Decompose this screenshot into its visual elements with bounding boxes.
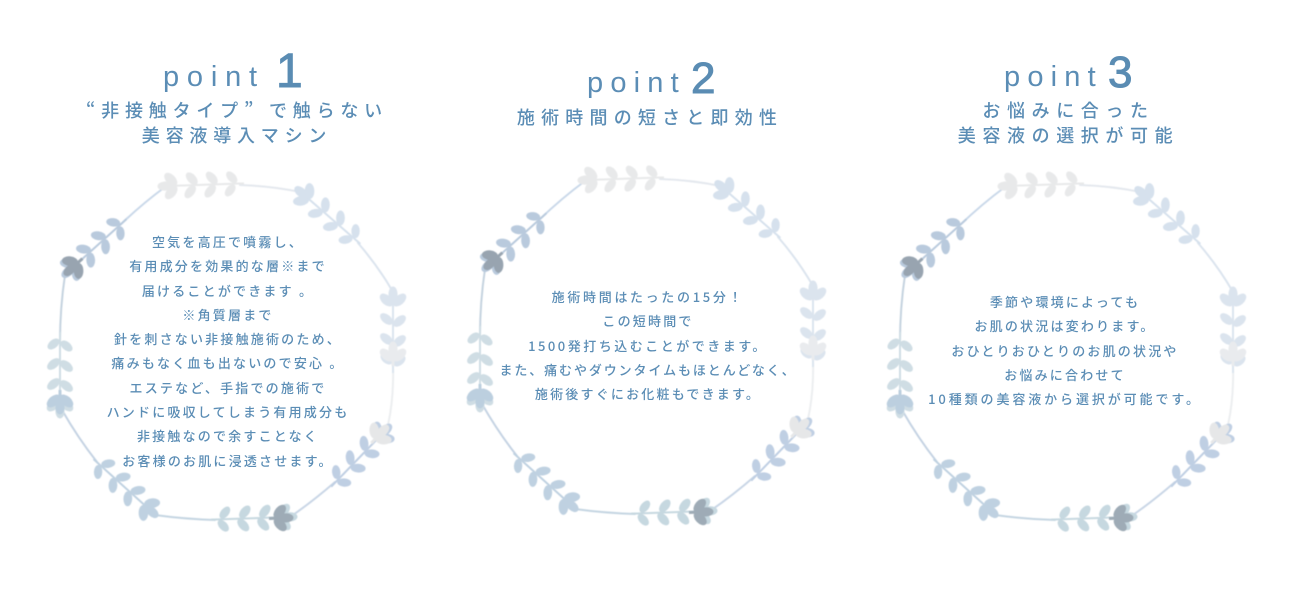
text block: point 2: この短時間で: [602, 311, 694, 330]
panel: point 3 heading: [958, 48, 1179, 148]
panel: point 1 heading: [86, 45, 388, 148]
point label 2: point: [587, 67, 686, 99]
wreath: point 3: [884, 168, 1249, 535]
text block: point 3: お肌の状況は変わります。: [974, 316, 1156, 335]
text block: point 2: 施術後すぐにお化粧もできます。: [535, 384, 761, 403]
title 1: “非接触タイプ” で触らない: [86, 97, 388, 123]
text block: point 1: 針を刺さない非接触施術のため、: [114, 329, 342, 348]
title 3: [958, 97, 1179, 148]
text block: point 3: 10種類の美容液から選択が可能です。: [928, 389, 1202, 408]
number 1: 1: [276, 45, 303, 98]
title 3: 美容液の選択が可能: [958, 122, 1179, 148]
point label 3: point: [1004, 61, 1103, 93]
text block: point 3: おひとりおひとりのお肌の状況や: [951, 341, 1179, 360]
wreath: point 1: [44, 168, 409, 535]
text block: point 2: また、痛むやダウンタイムもほとんどなく、: [499, 360, 797, 379]
text block: point 1: [107, 232, 349, 470]
number 2: 2: [691, 54, 715, 103]
text block: point 1: 痛みもなく血も出ないので安心 。: [111, 353, 345, 372]
text block: point 3: 季節や環境によっても: [990, 292, 1140, 311]
title 2: 施術時間の短さと即効性: [517, 104, 783, 130]
text block: point 1: 非接触なので余すことなく: [137, 426, 319, 445]
text block: point 2: 施術時間はたったの15分！: [552, 287, 744, 306]
text block: point 2: 1500発打ち込むことができます。: [528, 336, 768, 355]
text block: point 2: [499, 287, 797, 403]
text block: point 1: ハンドに吸収してしまう有用成分も: [107, 402, 349, 421]
wreath: point 2: [464, 162, 829, 529]
number 3: 3: [1108, 48, 1132, 97]
text block: point 1: 届けることができます 。: [142, 281, 314, 300]
title 1: [86, 97, 388, 148]
text block: point 3: [928, 292, 1202, 408]
text block: point 1: ※角質層まで: [182, 305, 274, 324]
point label 1: point: [163, 61, 265, 93]
text block: point 1: エステなど、手指での施術で: [130, 378, 326, 397]
text block: point 1: 空気を高圧で噴霧し、: [152, 232, 304, 251]
title 3: お悩みに合った: [982, 97, 1155, 123]
text block: point 3: お悩みに合わせて: [1004, 365, 1126, 384]
text block: point 1: お客様のお肌に浸透させます。: [122, 451, 334, 470]
title 1: 美容液導入マシン: [142, 122, 332, 148]
panel: point 2 heading: [517, 54, 783, 130]
text block: point 1: 有用成分を効果的な層※まで: [129, 256, 327, 275]
